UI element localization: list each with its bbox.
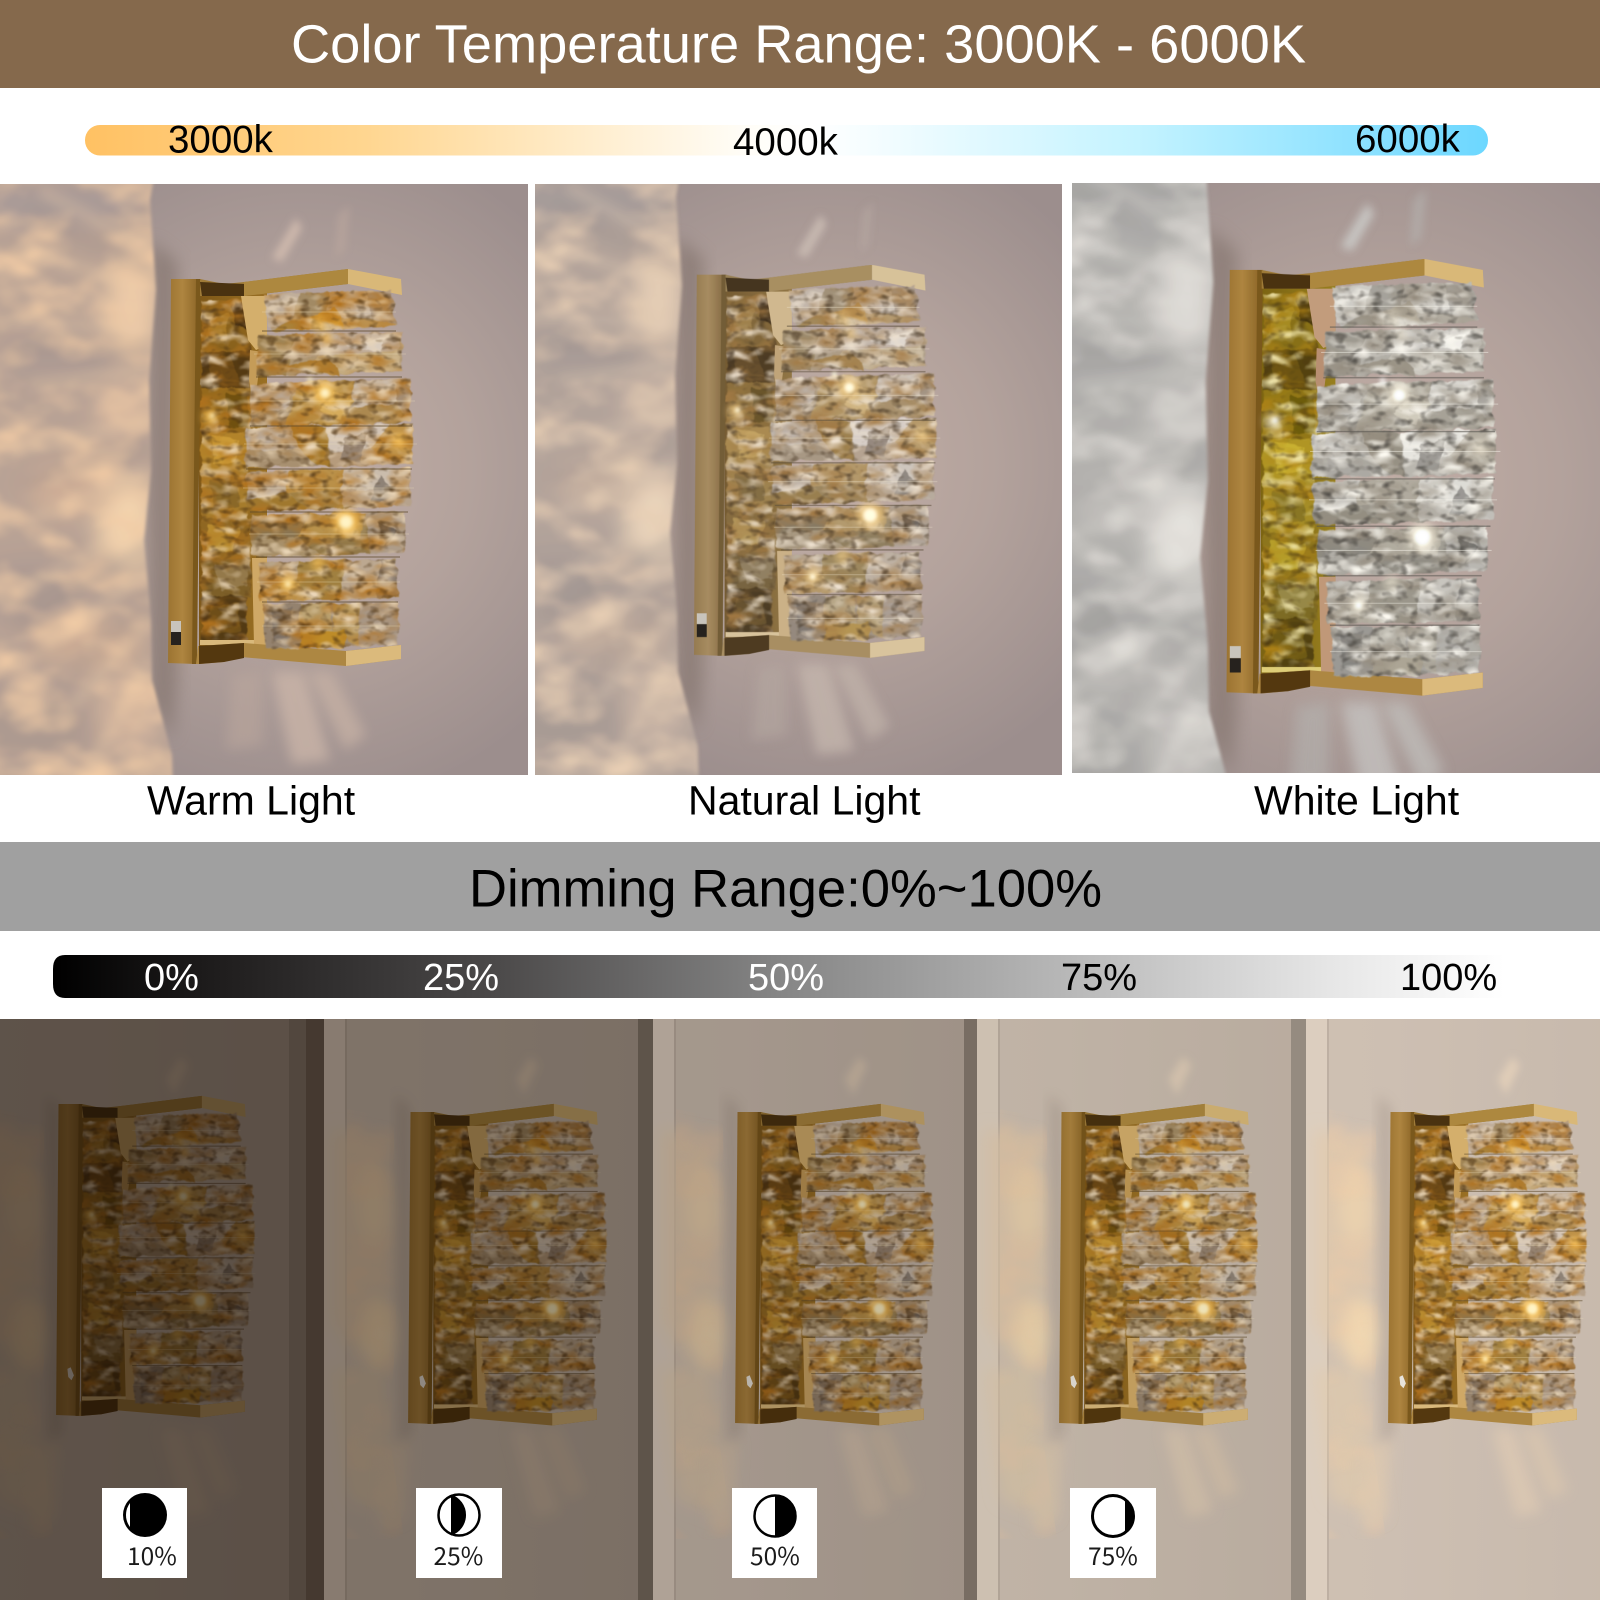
dimming gradient scale	[53, 955, 1504, 999]
icon: 10 percent badge	[102, 1488, 187, 1578]
icon: 75 percent badge: 75%	[1088, 1538, 1138, 1573]
icon: 25 percent badge	[416, 1488, 502, 1578]
panel: lamp at 50 percent brightness	[653, 1019, 977, 1600]
color temperature gradient scale: 6000k	[1355, 118, 1461, 161]
dimming gradient scale: 50%	[748, 957, 824, 999]
heading band: dimming range	[0, 842, 1600, 931]
panel: lamp at 25 percent brightness	[324, 1019, 653, 1600]
dimming gradient scale: 0%	[144, 957, 199, 999]
color temperature gradient scale	[85, 118, 1488, 164]
dimming gradient scale: 75%	[1061, 957, 1137, 999]
panel: warm light lamp photo	[0, 184, 528, 775]
dimming gradient scale: 25%	[423, 957, 499, 999]
caption: warm light: Warm Light	[147, 778, 356, 824]
icon: 10 percent badge: 10%	[127, 1538, 177, 1573]
caption: natural light: Natural Light	[688, 778, 921, 824]
dimming gradient scale: 100%	[1400, 957, 1497, 999]
heading band: color temperature: Color Temperature Range: 3000K - 6000K	[291, 14, 1306, 74]
color temperature gradient scale: 3000k	[168, 118, 274, 162]
heading band: color temperature	[0, 0, 1600, 88]
heading band: dimming range: Dimming Range:0%~100%	[469, 860, 1102, 918]
panel: white light lamp photo	[1072, 183, 1600, 773]
icon: 75 percent badge	[1070, 1488, 1156, 1578]
panel: natural light lamp photo	[535, 184, 1062, 775]
panel: lamp at 10 percent brightness	[0, 1019, 324, 1600]
icon: 50 percent badge	[732, 1488, 817, 1578]
caption: white light: White Light	[1254, 778, 1460, 824]
color temperature gradient scale: 4000k	[733, 121, 839, 164]
icon: 25 percent badge: 25%	[434, 1538, 483, 1573]
panel: lamp at full brightness	[1276, 1019, 1600, 1600]
icon: 50 percent badge: 50%	[750, 1538, 800, 1573]
panel: lamp at 75 percent brightness	[977, 1019, 1306, 1600]
